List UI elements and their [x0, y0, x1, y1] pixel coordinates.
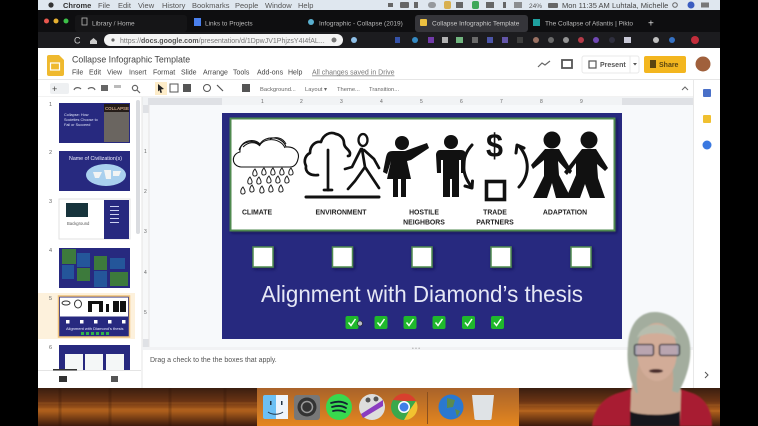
- icon: goods box: [486, 182, 504, 200]
- thumbnail 3: [59, 199, 130, 239]
- thumbnail 1: Collapse: How: [64, 113, 89, 117]
- thumbnail 4: [59, 248, 130, 288]
- docs header actions: Share: [659, 62, 679, 69]
- mac menu bar: Luhtala, Michelle: [612, 1, 668, 10]
- icon: dollar sign: $: [486, 127, 503, 164]
- mac menu bar: Edit: [118, 1, 132, 10]
- vertical ruler: 4: [144, 270, 147, 276]
- address bar: [38, 32, 720, 48]
- ruler: 1: [261, 99, 264, 105]
- vertical ruler: 1: [144, 149, 147, 155]
- speaker notes: • • •: [412, 346, 420, 352]
- ruler: 8: [540, 99, 543, 105]
- address bar: C: [74, 36, 81, 46]
- docs menu: Arrange: [203, 70, 228, 76]
- docs header actions: [538, 56, 710, 73]
- thumbnail 5 selected: Alignment with Diamond's thesis: [66, 326, 123, 331]
- docs menu: View: [107, 70, 123, 76]
- thumbnail 6: [59, 345, 130, 370]
- thumbnail 1: COLLAPSE: [105, 106, 129, 111]
- ruler: 9: [580, 99, 583, 105]
- thumbnail 1: [59, 103, 130, 143]
- icon labels: ADAPTATION: [543, 210, 587, 216]
- vertical ruler: 5: [144, 310, 147, 316]
- desktop wallpaper: [38, 388, 720, 426]
- toolbar: Layout ▾: [305, 87, 327, 93]
- thumbnail 2: [59, 151, 130, 191]
- icon: curved arrow up: [516, 145, 527, 187]
- right side panel: [694, 80, 712, 388]
- speaker notes: Drag a check to the the boxes that apply.: [150, 357, 277, 364]
- thumbnail 1: Fail or Succeed: [64, 123, 90, 127]
- browser tab strip: Infographic - Collapse (2019): [319, 20, 403, 28]
- slide canvas: [149, 105, 693, 347]
- icon: chrome: [391, 394, 417, 420]
- docs menu: File: [72, 70, 83, 76]
- browser tab strip: Links to Projects: [205, 20, 253, 28]
- browser tab strip: Collapse Infographic Template: [432, 20, 520, 28]
- icon: adaptation paper people: [531, 132, 608, 198]
- ruler: 6: [460, 99, 463, 105]
- icon labels: NEIGHBORS: [403, 220, 445, 226]
- browser tab strip: The Collapse of Atlantis | Pikto: [545, 20, 633, 28]
- ruler: 5: [420, 99, 423, 105]
- toolbar: Theme...: [337, 87, 360, 93]
- ruler: 4: [380, 99, 383, 105]
- ruler: 2: [300, 99, 303, 105]
- mac menu bar: View: [138, 1, 155, 10]
- browser tab strip: +: [648, 18, 654, 30]
- slides logo icon: [47, 55, 64, 76]
- presenter video: [592, 312, 712, 426]
- vertical ruler: [142, 105, 149, 347]
- empty check boxes: [253, 247, 591, 267]
- ruler: 3: [340, 99, 343, 105]
- toolbar: +: [52, 84, 57, 94]
- thumbnail 2: Name of Civilization(s): [69, 156, 122, 162]
- docs menu: Insert: [129, 70, 147, 76]
- browser tab strip: Library / Home: [92, 20, 135, 28]
- mac menu bar: Chrome: [63, 1, 91, 10]
- icon: rain cloud: [233, 138, 298, 194]
- icon panel: [230, 118, 614, 230]
- icon: hostile neighbors: [383, 135, 466, 197]
- docs header actions: Present: [600, 62, 626, 69]
- filmstrip panel: 4: [49, 248, 52, 254]
- toolbar: Transition...: [369, 87, 399, 93]
- slide: [222, 113, 622, 339]
- docs menu: [72, 70, 395, 76]
- document title: Collapse Infographic Template: [72, 54, 190, 64]
- ruler: 7: [500, 99, 503, 105]
- browser tab strip: [38, 10, 720, 32]
- thumbnail 1: Societies Choose to: [64, 118, 98, 122]
- icon labels: TRADE: [483, 210, 507, 216]
- address bar: https://docs.google.com/presentation/d/1DpwJV1PhjzsY4I4fAL...: [120, 38, 325, 45]
- icon: system preferences: [294, 395, 320, 420]
- filmstrip panel: 1: [49, 102, 52, 108]
- mac menu bar: History: [162, 1, 186, 10]
- docs menu: Tools: [233, 70, 250, 76]
- filmstrip panel: 6: [49, 345, 52, 351]
- docs app window background: [38, 48, 720, 388]
- toolbar: Background...: [260, 87, 296, 93]
- icon labels: PARTNERS: [476, 220, 514, 226]
- docs menu: All changes saved in Drive: [312, 70, 395, 76]
- mac menu bar: Mon 11:35 AM: [562, 1, 610, 10]
- filmstrip panel: 5: [49, 296, 52, 302]
- icon: curved arrow down: [464, 145, 472, 188]
- icon: imovie: [359, 394, 385, 420]
- icon labels: HOSTILE: [409, 210, 439, 216]
- docs menu: Format: [153, 70, 175, 76]
- thumbnail 3: Background: [67, 221, 90, 226]
- filmstrip footer: [38, 369, 141, 388]
- icon: globe: [438, 394, 464, 420]
- dock: [257, 388, 519, 426]
- icon: spotify: [326, 394, 352, 420]
- mac menu bar: File: [98, 1, 110, 10]
- thumbnail 5 selected: [58, 296, 130, 337]
- docs menu: Help: [288, 70, 303, 76]
- icon labels: CLIMATE: [242, 210, 272, 216]
- vertical ruler: 2: [144, 189, 147, 195]
- vertical ruler: 3: [144, 229, 147, 235]
- mac menu bar: Bookmarks: [192, 1, 230, 10]
- speaker notes: [142, 346, 693, 364]
- mac menu bar: Help: [298, 1, 313, 10]
- ruler: [142, 97, 693, 106]
- docs menu: Add-ons: [257, 70, 284, 76]
- icon: finder: [263, 395, 288, 419]
- filmstrip panel: 2: [49, 150, 52, 156]
- docs menu: Edit: [89, 70, 101, 76]
- filmstrip panel: 3: [49, 199, 52, 205]
- icon: trash: [472, 395, 494, 420]
- slide heading: Alignment with Diamond’s thesis: [261, 281, 583, 307]
- icon: tree and walker: [305, 133, 379, 197]
- green check marks: [346, 316, 504, 329]
- docs menu: Slide: [181, 70, 197, 76]
- icon labels: [242, 210, 587, 226]
- mac menu bar: [38, 0, 720, 10]
- toolbar: [38, 80, 720, 97]
- icon labels: ENVIRONMENT: [316, 210, 367, 216]
- mac menu bar: 24%: [529, 3, 542, 10]
- mac menu bar: People: [235, 1, 258, 10]
- filmstrip panel: [38, 97, 142, 388]
- mac menu bar: Window: [265, 1, 292, 10]
